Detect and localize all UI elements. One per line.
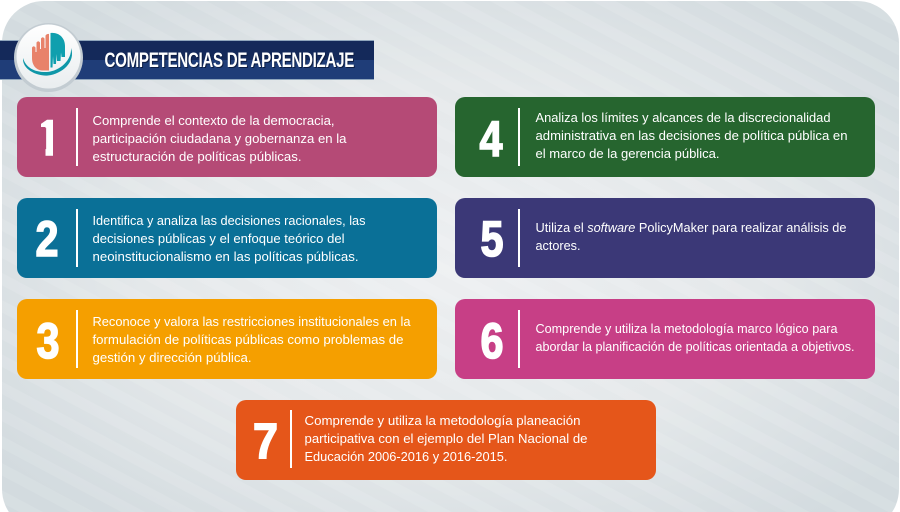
number 2: 2 <box>36 211 58 267</box>
text block 7: participativa con el ejemplo del Plan Nacional de <box>304 432 588 446</box>
text block 2: neoinstitucionalismo en las políticas públicas. <box>92 250 358 264</box>
text block 3: Reconoce y valora las restricciones institucionales en la <box>92 315 410 329</box>
text block 6: Comprende y utiliza la metodología marco lógico para <box>536 322 838 336</box>
icon: hand logo <box>14 23 83 92</box>
number 4: 4 <box>480 111 503 167</box>
text block 2: decisiones públicas y el enfoque teórico del <box>92 232 344 246</box>
text block 4: el marco de la gerencia pública. <box>536 147 720 161</box>
number 1: 1 <box>36 110 62 166</box>
text block 1: participación ciudadana y gobernanza en la <box>92 132 346 146</box>
number 5: 5 <box>480 211 504 267</box>
text block 1: estructuración de políticas públicas. <box>92 150 302 164</box>
text block 1: Comprende el contexto de la democracia, <box>92 114 334 128</box>
text block 5: Utiliza el software PolicyMaker para realizar análisis de <box>536 221 846 235</box>
text block 3: formulación de políticas públicas como problemas de <box>92 333 404 347</box>
panel: competencia 2 <box>17 198 437 278</box>
text block 7 <box>304 414 588 464</box>
panel: competencia 7 <box>236 400 656 480</box>
title: COMPETENCIAS DE APRENDIZAJE <box>104 47 354 72</box>
text block 1 <box>92 114 346 164</box>
text block 4: administrativa en las decisiones de política pública en <box>536 129 848 143</box>
text block 6 <box>536 322 854 354</box>
heading banner <box>0 40 374 80</box>
text block 6: abordar la planificación de políticas orientada a objetivos. <box>536 340 854 354</box>
text block 4: Analiza los límites y alcances de la discrecionalidad <box>536 111 830 125</box>
text block 5 <box>536 221 846 253</box>
number 6: 6 <box>480 313 504 369</box>
panel: competencia 3 <box>17 299 437 379</box>
text block 7: Comprende y utiliza la metodología planeación <box>304 414 580 428</box>
panel: competencia 6 <box>455 299 875 379</box>
text block 2: Identifica y analiza las decisiones racionales, las <box>92 214 365 228</box>
text block 3: gestión y dirección pública. <box>92 351 252 365</box>
text block 7: Educación 2006-2016 y 2016-2015. <box>304 450 508 464</box>
text block 2 <box>92 214 365 264</box>
title: COMPETENCIAS DE APRENDIZAJE <box>106 48 355 73</box>
text block 5: actores. <box>536 239 580 253</box>
text block 3 <box>92 315 410 365</box>
panel: competencia 5 <box>455 198 875 278</box>
panel: competencia 4 <box>455 97 875 177</box>
number 3: 3 <box>36 313 60 369</box>
number 7: 7 <box>253 414 278 470</box>
panel: competencia 1 <box>17 97 437 177</box>
text block 4 <box>536 111 848 161</box>
